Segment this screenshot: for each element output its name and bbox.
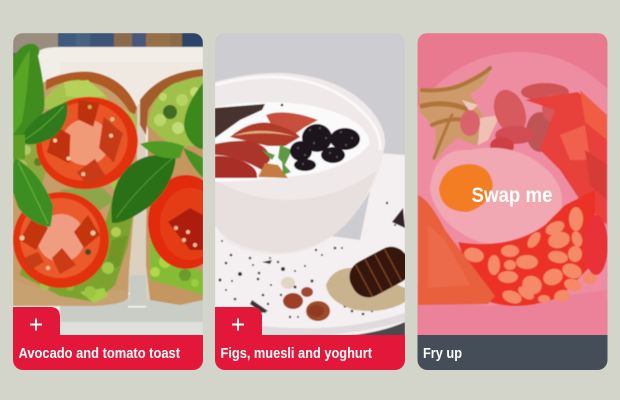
mint (262, 145, 292, 175)
figs (266, 112, 318, 136)
photo: fry up with pink tint (418, 33, 608, 335)
tomato top (36, 96, 138, 190)
avocado left (44, 80, 108, 112)
icon: plus (232, 318, 244, 330)
photo: fig and yoghurt bowl (215, 33, 416, 340)
label: avocado and tomato toast: Avocado and tomato toast (18, 345, 180, 362)
herbs (419, 66, 491, 162)
label: figs, muesli and yoghurt: Figs, muesli and yoghurt (220, 345, 372, 362)
label bar (13, 335, 203, 370)
basil leaves (13, 44, 44, 142)
beans sauce (458, 190, 595, 306)
toast (418, 195, 495, 305)
yolk (439, 164, 493, 212)
panel: avocado and tomato toast card (13, 33, 224, 370)
honey puddle (326, 268, 405, 311)
tomato (584, 215, 608, 275)
tab with plus icon (215, 307, 262, 336)
label bar (215, 335, 405, 370)
yoghurt (215, 102, 369, 182)
tab with plus icon (13, 307, 60, 336)
tomato bottom (13, 192, 109, 288)
plate (418, 52, 608, 306)
tomato right (148, 174, 203, 270)
toast right (146, 75, 203, 306)
poppy seeds (218, 202, 396, 318)
label bar (417, 335, 608, 370)
plate (13, 47, 203, 335)
panel: fry up card (418, 33, 608, 370)
toast left (13, 72, 137, 306)
egg (430, 148, 562, 245)
beans (463, 207, 597, 306)
bacon (525, 92, 607, 225)
icon: plus (30, 318, 42, 330)
sausages and mushrooms (493, 89, 527, 128)
bowl (215, 73, 385, 255)
blackberries (290, 124, 360, 171)
photo: avocado toast (13, 33, 203, 335)
honey dipper (348, 246, 405, 298)
text: swap me: Swap me (472, 184, 552, 207)
plate (215, 153, 405, 340)
panel: figs, muesli and yoghurt card (215, 33, 416, 370)
nuts (283, 293, 303, 309)
label: fry up: Fry up (423, 345, 462, 362)
